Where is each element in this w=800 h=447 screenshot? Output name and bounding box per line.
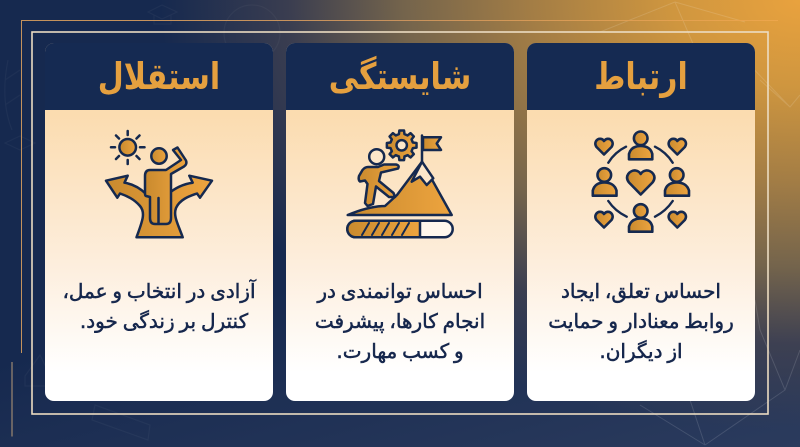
person bottom xyxy=(629,204,652,232)
heading: relatedness xyxy=(527,43,755,110)
text: autonomy description: آزادی در انتخاب و عمل، xyxy=(62,279,256,303)
gear xyxy=(387,130,417,160)
person left xyxy=(593,168,616,196)
icon: person at a crossroads with sun xyxy=(106,131,212,237)
sun xyxy=(111,131,144,164)
heading: competence xyxy=(286,43,514,110)
climber xyxy=(359,149,399,206)
text: autonomy description: کنترل بر زندگی خود. xyxy=(80,309,248,333)
forked road xyxy=(106,176,212,237)
small hearts xyxy=(595,139,686,228)
person top xyxy=(629,132,652,159)
inner frame xyxy=(32,32,768,414)
text: competence description: احساس توانمندی در xyxy=(317,279,483,303)
text: competence description: انجام کارها، پیشرفت xyxy=(315,309,485,333)
icon: people connected by hearts xyxy=(593,132,689,232)
center heart xyxy=(627,170,654,194)
icon: climber reaching mountain flag with gear and progress bar xyxy=(347,130,453,237)
text: relatedness description xyxy=(548,279,734,364)
mountain xyxy=(348,162,452,215)
text: relatedness description: روابط معنادار و حمایت xyxy=(548,309,734,333)
connecting arcs xyxy=(608,147,673,217)
heading: autonomy: استقلال xyxy=(98,56,220,99)
progress bar xyxy=(347,221,453,237)
flag xyxy=(422,136,441,162)
panel: competence xyxy=(286,43,514,401)
heading: competence: شایستگی xyxy=(329,56,471,99)
text: autonomy description xyxy=(62,278,257,334)
heading: autonomy xyxy=(45,43,273,110)
text: competence description xyxy=(315,279,485,364)
text: relatedness description: احساس تعلق، ایجاد xyxy=(561,279,721,303)
person xyxy=(145,148,186,224)
text: relatedness description: از دیگران. xyxy=(599,339,683,363)
heading: relatedness: ارتباط xyxy=(594,56,688,99)
panel: relatedness xyxy=(527,43,755,401)
text: competence description: و کسب مهارت. xyxy=(336,339,464,363)
panel: autonomy xyxy=(45,43,273,401)
person right xyxy=(665,168,689,196)
